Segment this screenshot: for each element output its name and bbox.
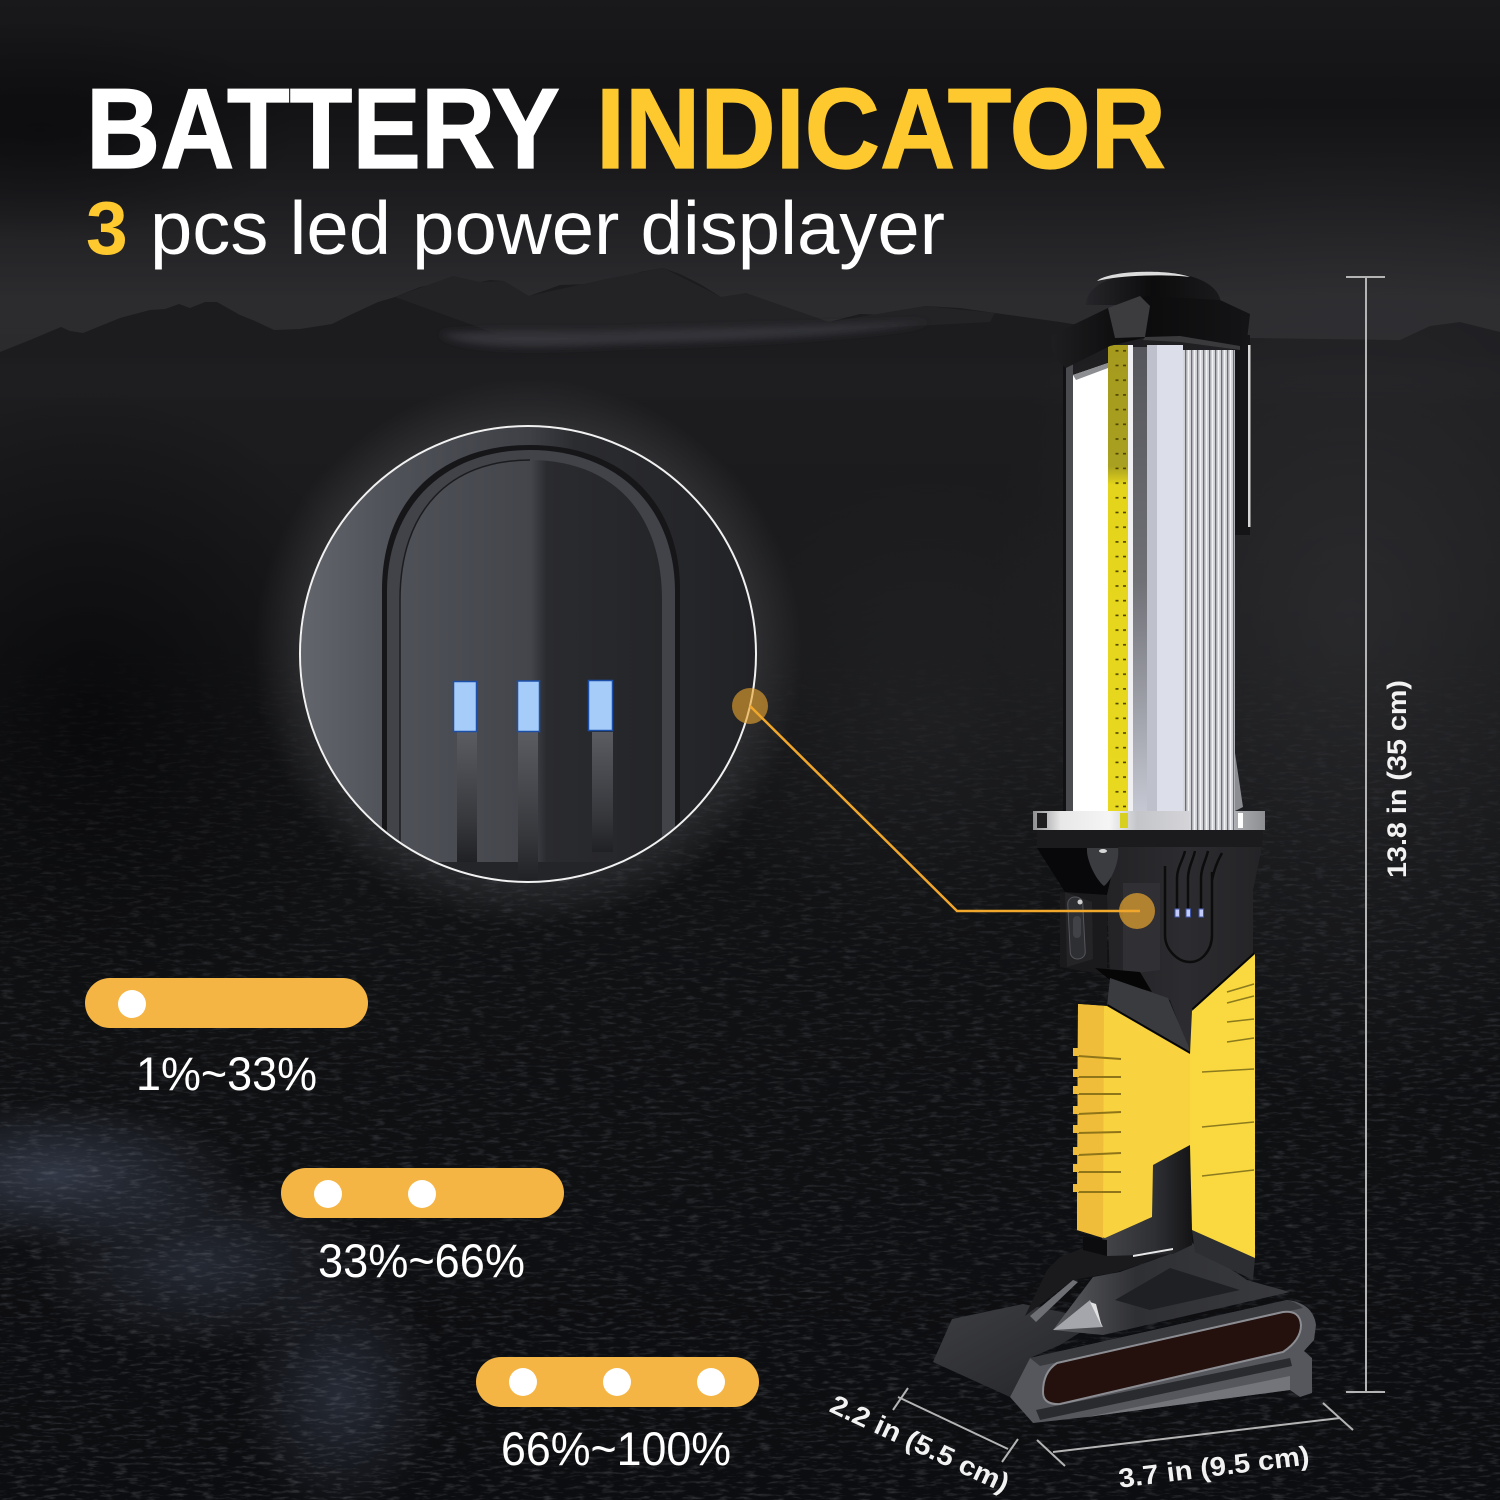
blue LEDs [454, 680, 612, 732]
tube column [1063, 345, 1243, 811]
battery window [1043, 1312, 1301, 1404]
title [86, 66, 1166, 193]
subtitle: 3 [86, 186, 128, 270]
title: INDICATOR [596, 66, 1166, 193]
side clip [1232, 335, 1250, 535]
battery level 1: one LED [85, 978, 368, 1100]
dimension: 2.2 in depth: 2.2 in (5.5 cm) [826, 1389, 1014, 1498]
LED display panel [1165, 851, 1222, 962]
rocker switch [1065, 892, 1093, 967]
yellow grip: right [1190, 954, 1255, 1258]
title: BATTERY [86, 66, 560, 193]
battery level 2: two LEDs: 33%~66% [318, 1234, 525, 1287]
base stem housing [1025, 1230, 1290, 1335]
column under grip [1083, 1145, 1192, 1257]
base plate [933, 1145, 1316, 1423]
power button dome [1087, 848, 1118, 886]
callout line and dots [732, 688, 1155, 929]
battery level 2: two LEDs [281, 1168, 564, 1287]
battery level 3: three LEDs [476, 1357, 759, 1475]
dimension: 3.7 in width [1037, 1403, 1353, 1494]
flashlight product [933, 272, 1316, 1423]
cap head [1051, 296, 1250, 368]
battery level 1: one LED: 1%~33% [136, 1047, 317, 1100]
cap top disk [1086, 272, 1221, 305]
magnifier: LED close-up [300, 426, 758, 892]
yellow grip: left [1073, 1004, 1190, 1238]
battery level 3: three LEDs: 66%~100% [501, 1422, 731, 1475]
dimension: 3.7 in width: 3.7 in (9.5 cm) [1117, 1440, 1311, 1494]
flange ring [1033, 811, 1265, 830]
subtitle: pcs led power displayer [150, 186, 945, 270]
LED trails [457, 732, 613, 862]
ruler: height 13.8 in: 13.8 in (35 cm) [1382, 680, 1412, 878]
head body [1037, 830, 1263, 1054]
